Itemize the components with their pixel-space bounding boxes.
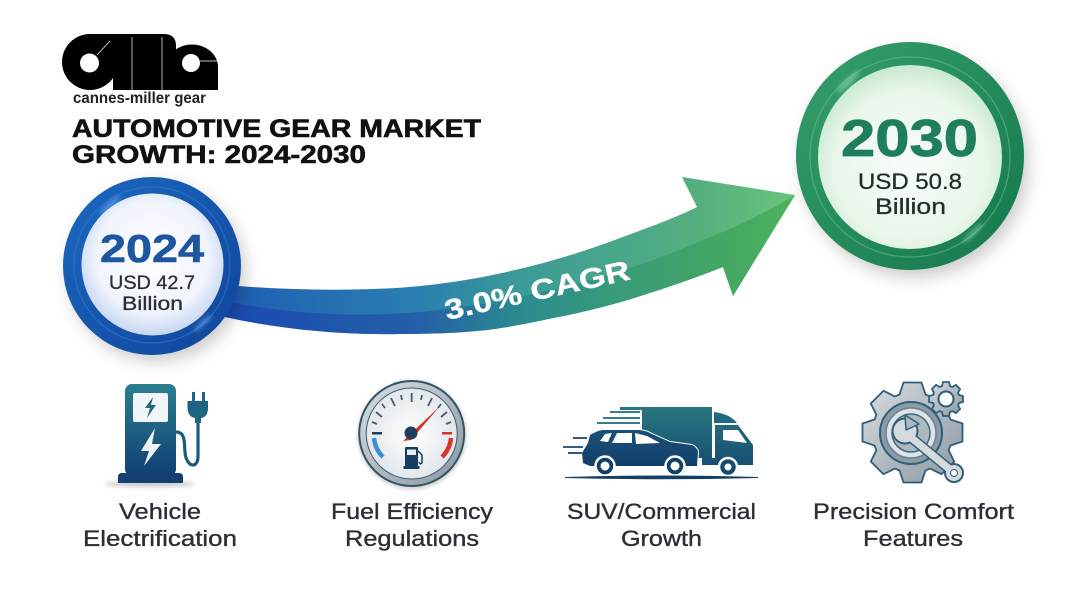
icon: fuel gauge	[358, 380, 466, 489]
logo: oma cannes-miller gear: cannes-miller gear	[73, 90, 206, 107]
label: vehicle electrification	[83, 499, 237, 551]
label: precision comfort features: Precision Comfort	[813, 499, 1014, 524]
label: fuel efficiency regulations: Regulations	[345, 526, 479, 551]
circle: 2030 value: USD 50.8	[858, 169, 962, 194]
circle: 2024 value: Billion	[122, 294, 183, 315]
arrow label: 3.0% CAGR	[442, 255, 633, 326]
small gear	[929, 382, 963, 416]
circle: 2024 value: USD 42.7	[109, 273, 195, 294]
title: GROWTH: 2024-2030	[72, 141, 366, 169]
label: SUV commercial growth	[567, 499, 756, 551]
label: precision comfort features: Features	[863, 526, 963, 551]
logo: oma cannes-miller gear: oma	[70, 16, 215, 104]
label: SUV commercial growth: Growth	[621, 526, 702, 551]
label: vehicle electrification: Vehicle	[119, 499, 201, 524]
circle: 2024 value: 2024	[100, 228, 204, 271]
icon: EV charger	[105, 384, 208, 486]
title	[72, 115, 481, 169]
label: fuel efficiency regulations: Fuel Efficiency	[331, 499, 493, 524]
circle: 2030 value	[796, 42, 1028, 277]
label: precision comfort features	[813, 499, 1014, 551]
icon: gears and wrench	[862, 382, 964, 483]
circle: 2030 value: 2030	[841, 110, 978, 168]
circle: 2030 value: Billion	[875, 194, 946, 219]
label: fuel efficiency regulations	[331, 499, 493, 551]
title: AUTOMOTIVE GEAR MARKET	[72, 115, 481, 143]
growth arrow	[225, 177, 795, 334]
label: vehicle electrification: Electrification	[83, 526, 237, 551]
label: SUV commercial growth: SUV/Commercial	[567, 499, 756, 524]
wrench	[892, 415, 964, 483]
circle: 2024 value	[63, 177, 245, 361]
icon: car and truck	[563, 407, 758, 479]
